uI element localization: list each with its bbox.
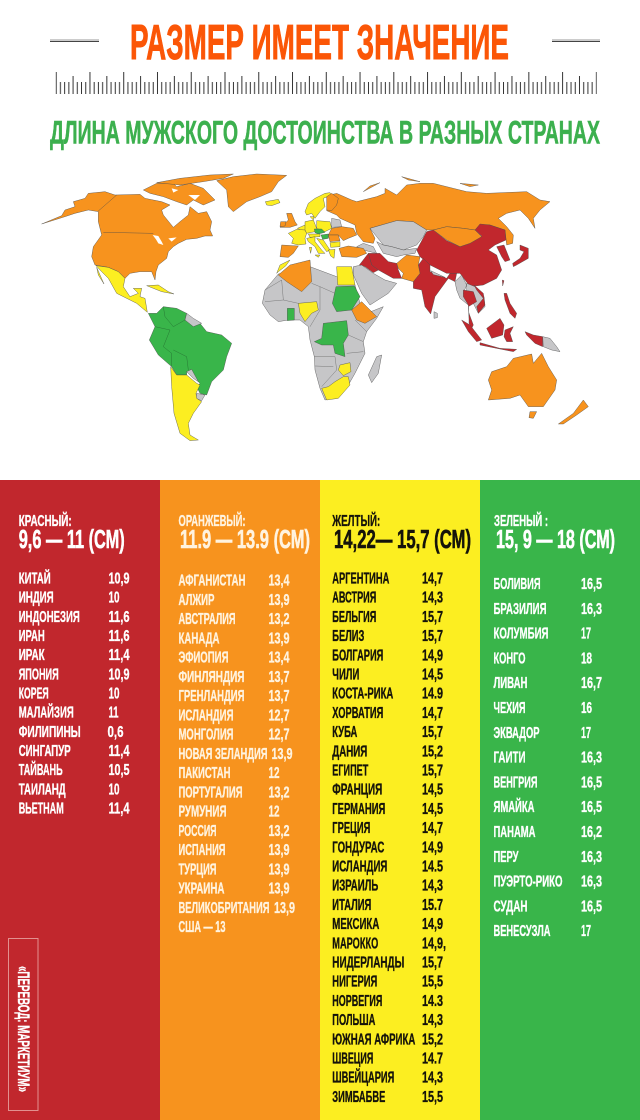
yellow country list: ГЕРМАНИЯ bbox=[332, 801, 385, 818]
yellow country list bbox=[332, 570, 446, 1106]
map: Europe bbox=[280, 193, 367, 258]
orange country list: 12 bbox=[268, 804, 280, 820]
red country list: СИНГАПУР bbox=[19, 743, 71, 760]
orange country list: 13,9 bbox=[268, 880, 290, 898]
yellow country list: 14,9 bbox=[422, 647, 443, 664]
red country list: ИРАН bbox=[19, 628, 45, 645]
green country list: 16,3 bbox=[581, 601, 602, 618]
yellow country list: 15,7 bbox=[422, 724, 443, 741]
orange heading: 11.9 — 13.9 (СМ) bbox=[180, 526, 310, 554]
yellow country list: ЗИМБАБВЕ bbox=[332, 1089, 385, 1106]
yellow country list: МАРОККО bbox=[332, 935, 378, 952]
orange country list: 13,9 bbox=[268, 842, 290, 859]
orange country list: АЛЖИР bbox=[178, 592, 215, 609]
orange country list: УКРАИНА bbox=[178, 880, 225, 898]
green country list: 16,3 bbox=[581, 849, 602, 866]
yellow country list: 14,9 bbox=[422, 916, 443, 933]
green heading bbox=[494, 511, 615, 554]
yellow country list: ГОНДУРАС bbox=[332, 839, 385, 856]
red country list: МАЛАЙЗИЯ bbox=[19, 703, 74, 722]
green country list: 16,5 bbox=[581, 799, 602, 816]
yellow country list: БЕЛИЗ bbox=[332, 628, 364, 645]
title rule: left bbox=[50, 40, 99, 42]
yellow country list: 14.7 bbox=[422, 1050, 443, 1068]
orange country list: 13,2 bbox=[268, 611, 290, 628]
yellow country list: 14,3 bbox=[422, 878, 443, 895]
green country list: 17 bbox=[581, 626, 591, 643]
orange country list: КАНАДА bbox=[178, 630, 220, 647]
orange heading: ОРАНЖЕВЫЙ: bbox=[178, 511, 246, 530]
yellow heading bbox=[332, 511, 471, 554]
yellow country list: ШВЕЦИЯ bbox=[332, 1050, 373, 1068]
green country list: 16,7 bbox=[581, 675, 602, 692]
green country list bbox=[494, 576, 602, 940]
orange country list: АВСТРАЛИЯ bbox=[178, 611, 236, 628]
red country list: 10 bbox=[108, 686, 120, 702]
green country list: ПЕРУ bbox=[494, 849, 519, 866]
orange country list: 13,9 bbox=[272, 746, 293, 763]
green country list: 16,2 bbox=[581, 824, 602, 841]
green country list: ВЕНЕСУЗЛА bbox=[494, 923, 551, 940]
yellow country list: АРГЕНТИНА bbox=[332, 570, 390, 588]
yellow country list: 14,7 bbox=[422, 705, 443, 722]
yellow country list: АВСТРИЯ bbox=[332, 590, 376, 607]
green country list: 17 bbox=[581, 725, 591, 742]
red country list: 11,4 bbox=[108, 647, 130, 664]
orange heading bbox=[178, 511, 310, 554]
orange country list: 12,7 bbox=[268, 726, 290, 744]
yellow country list: 14.3 bbox=[422, 993, 443, 1010]
green country list: 16,5 bbox=[581, 774, 602, 791]
yellow country list: 14,5 bbox=[422, 782, 443, 799]
red country list: 10 bbox=[108, 590, 120, 607]
yellow country list: МЕКСИКА bbox=[332, 916, 380, 933]
green country list: КОЛУМБИЯ bbox=[494, 626, 548, 643]
green country list: ЛИВАН bbox=[494, 675, 528, 692]
yellow country list: 15,7 bbox=[422, 762, 443, 780]
orange country list: США — 13 bbox=[178, 919, 226, 936]
panel: orange bbox=[160, 480, 320, 1120]
green country list: 16,5 bbox=[581, 576, 602, 593]
orange country list: ВЕЛИКОБРИТАНИЯ bbox=[178, 900, 270, 917]
orange country list: 13,9 bbox=[274, 900, 295, 917]
orange country list: РУМУНИЯ bbox=[178, 804, 226, 820]
yellow country list: ПОЛЬША bbox=[332, 1012, 376, 1029]
green country list: СУДАН bbox=[494, 898, 528, 915]
orange country list: МОНГОЛИЯ bbox=[178, 726, 234, 744]
yellow country list: ШВЕЙЦАРИЯ bbox=[332, 1068, 394, 1087]
orange country list: ТУРЦИЯ bbox=[178, 861, 216, 878]
red country list: 0,6 bbox=[108, 724, 124, 741]
red country list: 10 bbox=[108, 781, 120, 798]
yellow country list: ЮЖНАЯ АФРИКА bbox=[332, 1031, 416, 1048]
yellow country list: 15,7 bbox=[422, 609, 443, 626]
red country list: ЯПОНИЯ bbox=[19, 666, 59, 683]
translation credit box bbox=[8, 938, 38, 1110]
map: Africa bbox=[262, 260, 383, 400]
red heading: КРАСНЫЙ: bbox=[19, 511, 72, 530]
title rule: right bbox=[552, 40, 600, 42]
green country list: 16 bbox=[581, 700, 592, 717]
red country list: 10,9 bbox=[108, 570, 130, 588]
yellow country list: 14,3 bbox=[422, 590, 443, 607]
orange country list: 13,9 bbox=[268, 630, 290, 647]
panel: yellow bbox=[320, 480, 480, 1120]
yellow country list: 14,3 bbox=[422, 1012, 443, 1029]
world map bbox=[42, 174, 588, 441]
yellow country list: 15,5 bbox=[422, 1089, 443, 1106]
red country list: ИНДИЯ bbox=[19, 590, 54, 607]
orange country list: 13,9 bbox=[268, 861, 290, 878]
red country list: ИРАК bbox=[19, 647, 45, 664]
panel: red bbox=[0, 480, 160, 1120]
ruler bbox=[56, 72, 597, 94]
yellow country list: 14,7 bbox=[422, 570, 443, 588]
yellow country list: 15,7 bbox=[422, 628, 443, 645]
yellow country list: 15,5 bbox=[422, 974, 443, 991]
orange country list: РОССИЯ bbox=[178, 823, 216, 840]
yellow country list: 14.5 bbox=[422, 858, 443, 876]
green country list: ЧЕХИЯ bbox=[494, 700, 526, 717]
yellow country list: БЕЛЬГИЯ bbox=[332, 609, 376, 626]
green country list: ЭКВАДОР bbox=[494, 725, 540, 742]
green country list: БОЛИВИЯ bbox=[494, 576, 540, 593]
orange country list: 13,7 bbox=[268, 688, 290, 705]
yellow country list: 15.7 bbox=[422, 897, 443, 914]
orange country list: ИСЛАНДИЯ bbox=[178, 707, 234, 724]
yellow country list: ИСЛАНДИЯ bbox=[332, 858, 387, 876]
orange country list: ЭФИОПИЯ bbox=[178, 650, 228, 666]
red country list: 10,9 bbox=[108, 666, 130, 683]
yellow country list: КУБА bbox=[332, 724, 358, 741]
orange country list: 12,7 bbox=[268, 707, 290, 724]
yellow country list: 15,7 bbox=[422, 954, 443, 972]
yellow country list: НОРВЕГИЯ bbox=[332, 993, 382, 1010]
yellow country list: ХОРВАТИЯ bbox=[332, 705, 383, 722]
yellow country list: 14.9 bbox=[422, 686, 443, 703]
green country list: 17 bbox=[581, 923, 591, 940]
green country list: КОНГО bbox=[494, 650, 526, 667]
red heading bbox=[19, 511, 125, 554]
orange country list: АФГАНИСТАН bbox=[178, 572, 246, 590]
yellow country list: ГРЕЦИЯ bbox=[332, 820, 370, 837]
yellow country list: ЕГИПЕТ bbox=[332, 762, 368, 780]
red country list: ТАЙВАНЬ bbox=[19, 760, 63, 779]
yellow country list: ДАНИЯ bbox=[332, 743, 367, 760]
red country list: ИНДОНЕЗИЯ bbox=[19, 609, 80, 626]
yellow country list: ЧИЛИ bbox=[332, 666, 359, 684]
orange country list: 13,4 bbox=[268, 572, 290, 590]
orange country list bbox=[178, 572, 295, 936]
orange country list: 13,9 bbox=[268, 592, 290, 609]
red country list: ФИЛИПИНЫ bbox=[19, 724, 81, 741]
green country list: ПУЭРТО-РИКО bbox=[494, 874, 562, 891]
green heading: ЗЕЛЕНЫЙ : bbox=[494, 511, 548, 530]
orange country list: ИСПАНИЯ bbox=[178, 842, 226, 859]
green country list: ВЕНГРИЯ bbox=[494, 774, 538, 791]
red heading: 9,6 — 11 (СМ) bbox=[19, 526, 125, 554]
green country list: БРАЗИЛИЯ bbox=[494, 601, 546, 618]
red country list: 11,6 bbox=[108, 609, 130, 626]
yellow country list: 14,5 bbox=[422, 801, 443, 818]
red country list: ТАИЛАНД bbox=[19, 781, 66, 798]
yellow country list: 14,3 bbox=[422, 1070, 443, 1087]
green country list: 16,3 bbox=[581, 874, 602, 891]
orange country list: ПАКИСТАН bbox=[178, 765, 230, 782]
green country list: ЯМАЙКА bbox=[494, 797, 535, 816]
yellow country list: НИГЕРИЯ bbox=[332, 974, 377, 991]
red country list: КОРЕЯ bbox=[19, 686, 49, 702]
red country list: 10,5 bbox=[108, 762, 130, 779]
map: Eurasia and Oceania bbox=[327, 177, 588, 424]
yellow country list: 14,9, bbox=[422, 935, 446, 952]
yellow country list: БОЛГАРИЯ bbox=[332, 647, 383, 664]
red country list: 11,4 bbox=[108, 800, 130, 818]
yellow country list: 14,9 bbox=[422, 839, 443, 856]
red country list: 11,4 bbox=[108, 743, 130, 760]
green country list: 18 bbox=[581, 650, 592, 667]
yellow country list: ФРАНЦИЯ bbox=[332, 782, 382, 799]
yellow country list: 14,5 bbox=[422, 666, 443, 684]
yellow country list: 15,2 bbox=[422, 743, 443, 760]
orange country list: ПОРТУГАЛИЯ bbox=[178, 784, 242, 801]
yellow country list: ИТАЛИЯ bbox=[332, 897, 371, 914]
yellow heading: ЖЕЛТЫЙ: bbox=[332, 511, 380, 530]
orange country list: 13,2 bbox=[268, 823, 290, 840]
yellow country list: 14,7 bbox=[422, 820, 443, 837]
red country list: КИТАЙ bbox=[19, 568, 51, 588]
green country list: 16,3 bbox=[581, 750, 602, 767]
yellow country list: НИДЕРЛАНДЫ bbox=[332, 954, 404, 972]
yellow country list: 15,2 bbox=[422, 1031, 443, 1048]
orange country list: ГРЕНЛАНДИЯ bbox=[178, 688, 244, 705]
green country list: 16,5 bbox=[581, 898, 602, 915]
yellow country list: ИЗРАИЛЬ bbox=[332, 878, 378, 895]
yellow heading: 14,22— 15,7 (СМ) bbox=[334, 526, 471, 554]
orange country list: НОВАЯ ЗЕЛАНДИЯ bbox=[178, 746, 268, 763]
yellow country list: КОСТА-РИКА bbox=[332, 686, 394, 703]
green country list: ПАНАМА bbox=[494, 824, 536, 841]
orange country list: 13,4 bbox=[268, 650, 290, 666]
red country list: 11 bbox=[108, 705, 119, 722]
orange country list: 13,2 bbox=[268, 784, 290, 801]
orange country list: 13,7 bbox=[268, 669, 290, 686]
red country list: 11,6 bbox=[108, 628, 130, 645]
red country list bbox=[19, 568, 130, 818]
orange country list: 12 bbox=[268, 765, 280, 782]
orange country list: ФИНЛЯНДИЯ bbox=[178, 669, 244, 686]
green country list: ГАИТИ bbox=[494, 750, 526, 767]
panel: green bbox=[480, 480, 640, 1120]
map: Americas bbox=[42, 174, 287, 441]
red country list: ВЬЕТНАМ bbox=[19, 800, 64, 818]
